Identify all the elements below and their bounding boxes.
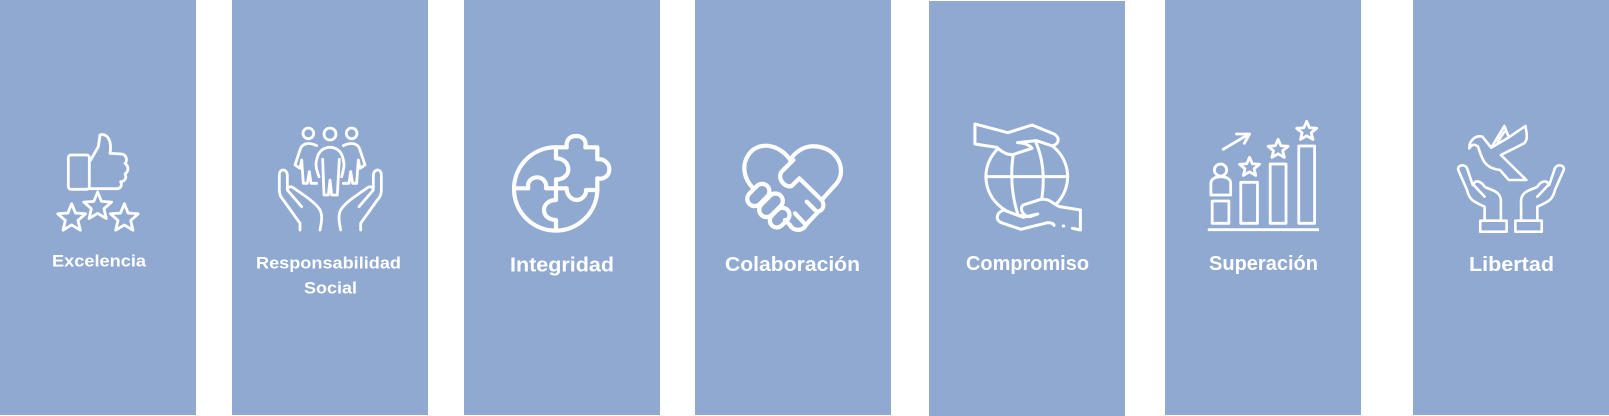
icon: hands holding globe (975, 124, 1080, 230)
icon: people held in hands (279, 128, 381, 230)
label: Excelencia: Excelencia (52, 252, 147, 270)
panel: Libertad (1413, 0, 1609, 415)
label: Integridad: Integridad (510, 254, 614, 276)
label: Compromiso: Compromiso (966, 253, 1089, 275)
label: Superación: Superación (1209, 253, 1318, 275)
icon: rising bars with stars (1208, 121, 1319, 230)
panel: Colaboración (695, 0, 891, 415)
icon: dove over open hands (1458, 126, 1564, 232)
icon: thumbs up with stars (58, 135, 138, 230)
label: Responsabilidad Social: Social (304, 278, 357, 298)
icon: puzzle globe (514, 136, 609, 231)
icon: heart handshake (744, 146, 841, 230)
panel: Superación (1165, 0, 1361, 415)
panel: Compromiso (929, 1, 1125, 416)
panel: Integridad (464, 0, 660, 415)
label: Responsabilidad Social (256, 254, 401, 298)
label: Responsabilidad Social: Responsabilidad (256, 254, 401, 272)
panel: Excelencia (0, 0, 196, 415)
panel: Responsabilidad Social (232, 0, 428, 415)
label: Colaboración: Colaboración (725, 254, 860, 276)
label: Libertad: Libertad (1469, 254, 1554, 276)
